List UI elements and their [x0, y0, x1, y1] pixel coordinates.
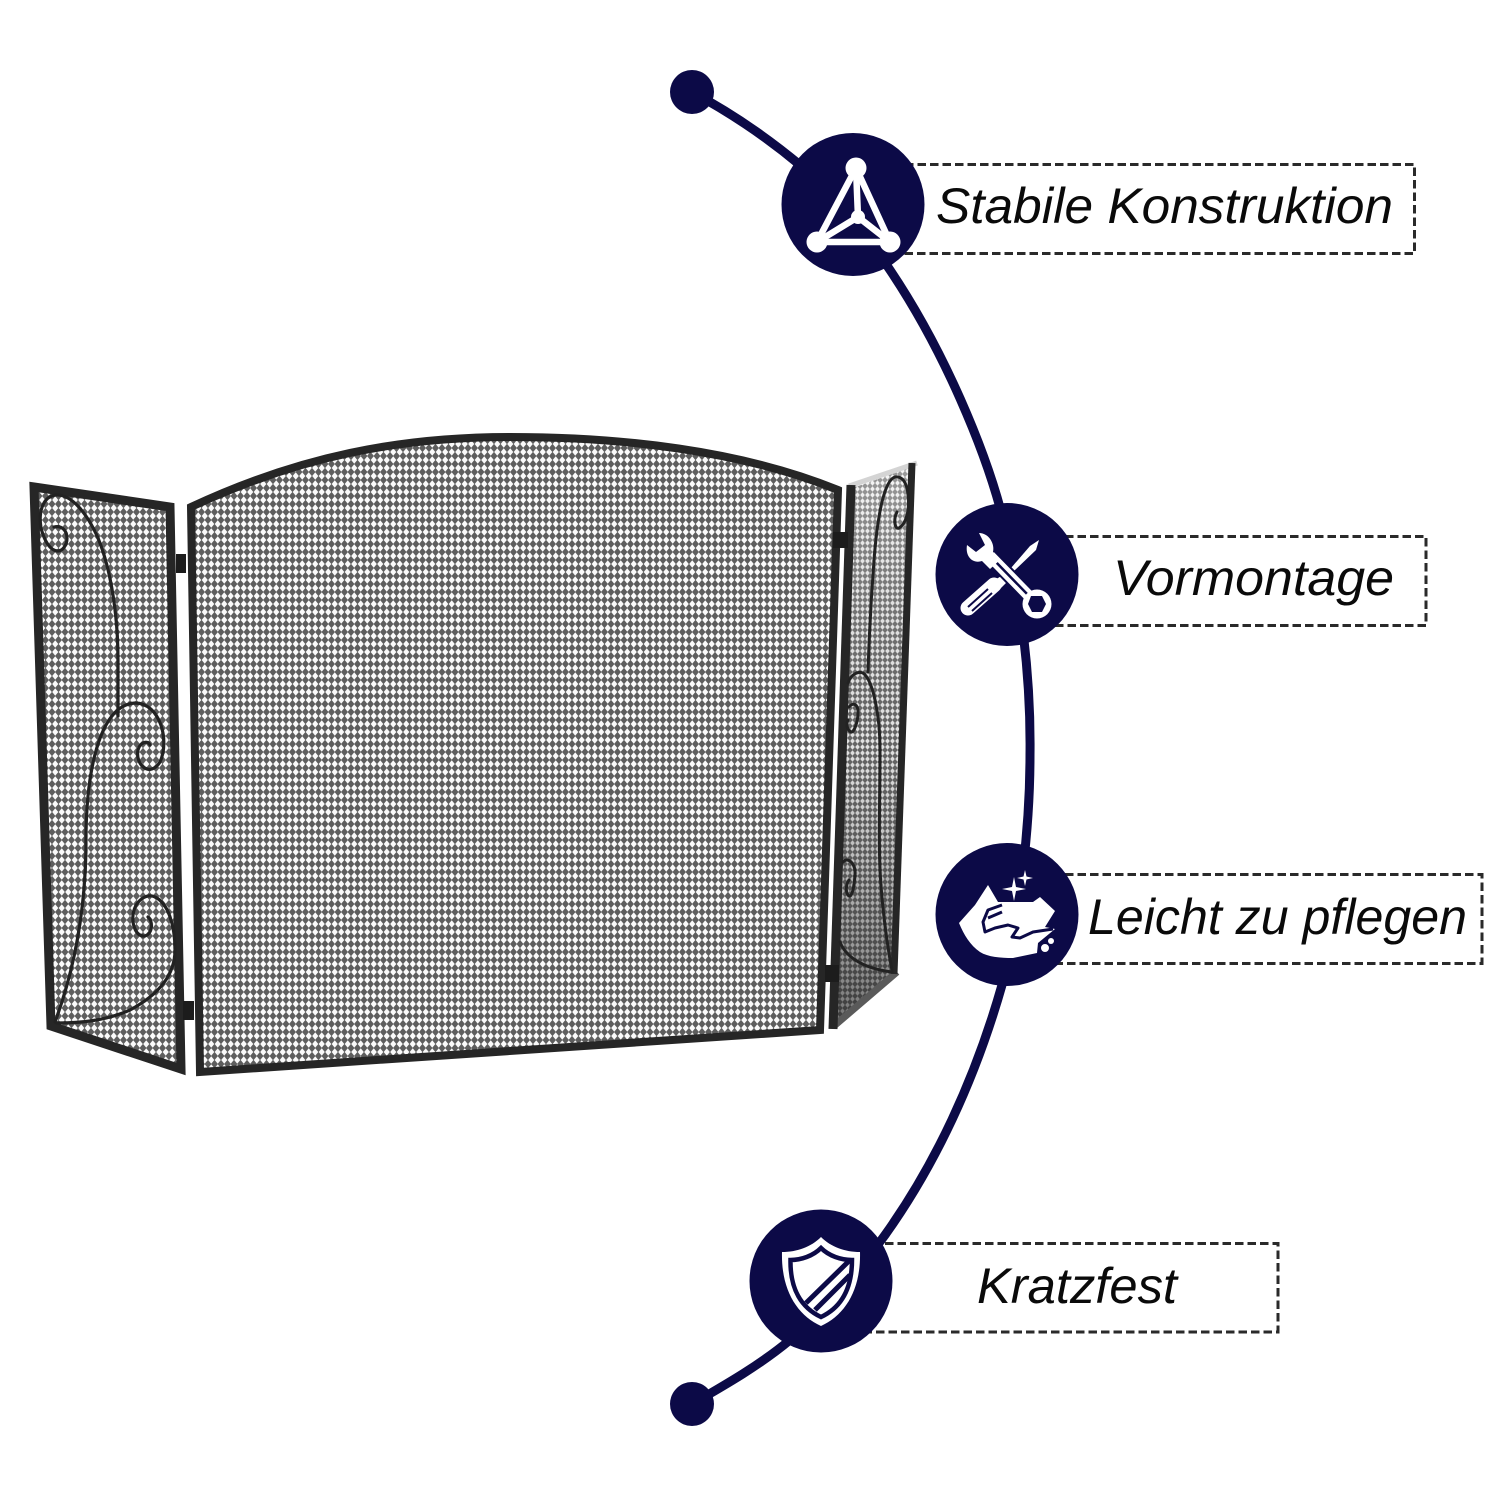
label box: Vormontage — [1040, 536, 1426, 626]
label box: Leicht zu pflegen — [1040, 874, 1482, 964]
label box: Kratzfest: Kratzfest — [977, 1258, 1179, 1314]
icon: shield — [750, 1210, 892, 1352]
icon: stable structure — [782, 133, 924, 276]
fire screen product — [34, 437, 917, 1072]
icon: wrench and screwdriver — [936, 503, 1078, 646]
icon: cleaning hand — [936, 843, 1078, 986]
label box: Stabile Konstruktion — [880, 164, 1414, 254]
label box: Leicht zu pflegen: Leicht zu pflegen — [1088, 889, 1467, 945]
hinges — [176, 532, 848, 1020]
label box: Kratzfest — [860, 1244, 1278, 1332]
label box: Stabile Konstruktion: Stabile Konstruktion — [936, 178, 1393, 234]
top end dot — [670, 70, 714, 114]
curved timeline line — [692, 92, 1030, 1404]
left panel — [34, 487, 181, 1069]
main panel — [191, 437, 838, 1072]
label box: Vormontage: Vormontage — [1113, 550, 1394, 606]
right panel — [833, 463, 917, 1029]
bottom end dot — [670, 1382, 714, 1426]
